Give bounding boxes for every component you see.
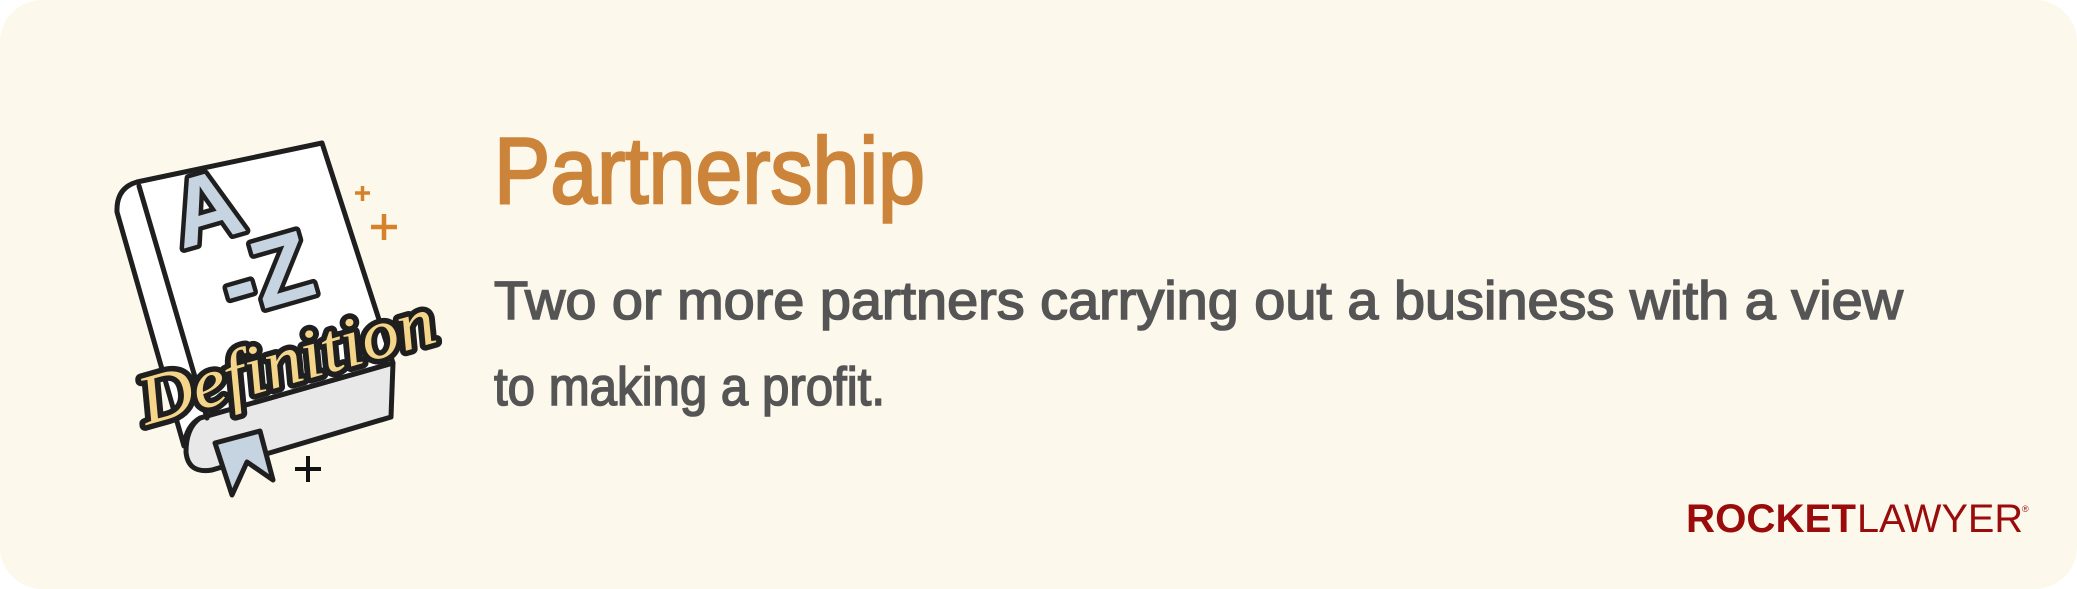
- book pages: [186, 363, 393, 471]
- logo: Rocket Lawyer: [1686, 497, 2029, 541]
- logo: Rocket Lawyer: ROCKET: [1686, 497, 1856, 541]
- text block: definition: Two or more partners carrying out a business with a view: [494, 271, 1904, 331]
- script word Definition: Definition: [128, 282, 444, 441]
- title: Partnership: [494, 118, 925, 223]
- text block: definition: [494, 271, 1904, 417]
- icon: definition book: [117, 134, 444, 495]
- logo: Rocket Lawyer: ®: [2022, 504, 2029, 514]
- spine line: [139, 186, 207, 418]
- book cover: [117, 143, 393, 446]
- bookmark: [215, 431, 273, 495]
- logo: Rocket Lawyer: LAWYER: [1857, 497, 2023, 541]
- letters A - Z: -Z: [208, 210, 325, 338]
- icon: black plus sign: [295, 456, 321, 482]
- text block: definition: to making a profit.: [494, 357, 885, 417]
- icon: orange sparkle plus signs: [355, 186, 397, 240]
- letters A - Z: [158, 134, 325, 346]
- letters A - Z: A: [158, 147, 254, 269]
